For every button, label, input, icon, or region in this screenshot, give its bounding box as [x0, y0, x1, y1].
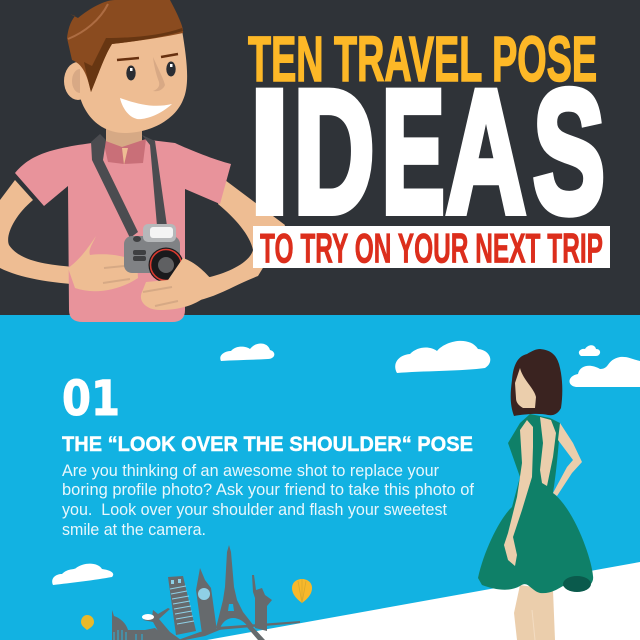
near arm: [504, 420, 533, 566]
collar opening: [122, 148, 128, 165]
cloud: right: [569, 357, 640, 387]
eye glints: [130, 64, 172, 71]
right eye: [166, 62, 176, 76]
step heading: THE “LOOK OVER THE SHOULDER“ POSE: [62, 433, 473, 456]
title: ideas: [250, 55, 605, 250]
nose: [153, 57, 165, 91]
shirt: [15, 140, 231, 322]
camera: [124, 224, 184, 282]
big ben: [196, 568, 217, 634]
face: [80, 30, 187, 133]
white ground slope: [207, 562, 640, 640]
left hand: [68, 236, 138, 291]
title: ideas: A: [446, 55, 526, 250]
title: ideas: I: [250, 55, 290, 250]
hair highlight: [68, 4, 108, 39]
capitol dome: [112, 610, 165, 640]
ear: [64, 62, 92, 100]
title: ideas: E: [382, 55, 445, 250]
left camera strap: [91, 134, 138, 238]
small cloud behind skyline: [142, 614, 154, 620]
smile: [120, 98, 172, 119]
right hand: [141, 258, 212, 310]
illustration: man with camera: [0, 0, 285, 322]
step description: you. Look over your shoulder and flash your sweetest: [62, 501, 447, 519]
step description: smile at the camera.: [62, 521, 206, 539]
hair shadow: [84, 28, 183, 92]
hair: [511, 349, 562, 416]
title: ideas: D: [294, 55, 374, 250]
left eye: [126, 66, 136, 80]
balloon: left: [81, 615, 94, 630]
step description: boring profile photo? Ask your friend to take this photo of: [62, 481, 474, 499]
eyebrows: [117, 54, 178, 60]
legs: [514, 585, 555, 640]
dress fold: [563, 576, 591, 592]
cloud: top centre: [395, 341, 490, 373]
dress: [478, 414, 593, 593]
hair: [67, 0, 183, 92]
ground hill: [178, 628, 222, 640]
bare back: [540, 417, 556, 486]
eiffel base shadow: [246, 626, 265, 640]
cloud: top left: [220, 343, 274, 361]
right camera strap: [142, 135, 167, 226]
face: [515, 368, 536, 408]
step description: Are you thinking of an awesome shot to replace your: [62, 462, 439, 480]
cloud: small right: [579, 345, 600, 356]
step number: 01: [62, 371, 120, 427]
inner ear: [72, 69, 88, 93]
left arm: [0, 180, 85, 285]
neck: [106, 128, 142, 152]
leaning tower of pisa: [168, 576, 196, 635]
right arm: [195, 180, 285, 300]
illustration: woman in green dress: [478, 349, 593, 640]
collar: [103, 139, 146, 164]
eiffel tower: [216, 545, 254, 628]
statue of liberty: [252, 575, 272, 631]
landmarks skyline: [112, 545, 300, 640]
balloon: right: [292, 579, 312, 603]
dark header band: [0, 0, 640, 315]
ground line: [217, 621, 300, 630]
far arm: [553, 423, 582, 496]
cloud: lower left: [52, 564, 113, 585]
leg divider: [532, 610, 535, 640]
step description: [62, 462, 474, 539]
christ statue: [143, 608, 181, 640]
